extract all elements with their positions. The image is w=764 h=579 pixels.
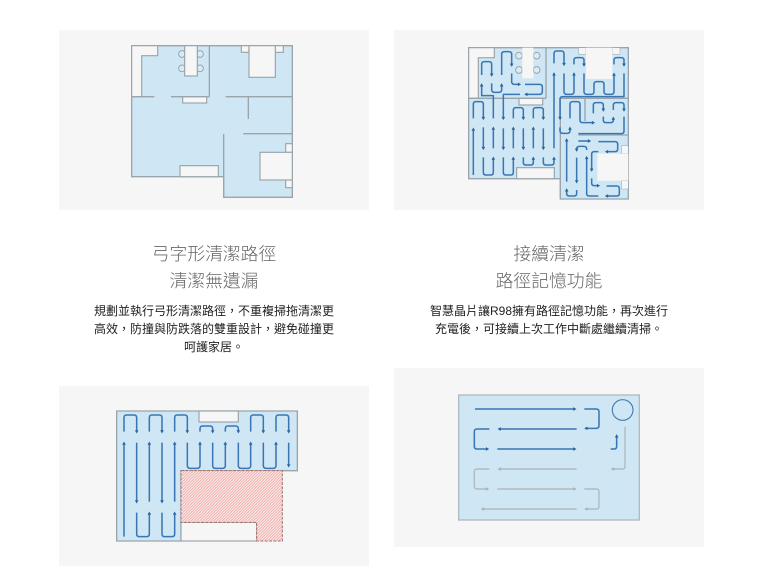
heading: path memory: 路徑記憶功能 (496, 271, 602, 291)
floor plan: room with restricted zone (117, 411, 297, 541)
heading: S-shaped path: 弓字形清潔路徑 (152, 244, 276, 264)
floor plan: rooms (469, 48, 628, 199)
heading: path memory (496, 244, 602, 291)
floor plan: apartment layout (132, 46, 292, 197)
panel: memorised route floor plan (394, 30, 704, 210)
text: S-shaped path description: 呵護家居。 (184, 340, 244, 354)
panel: obstacle avoidance floor plan (59, 386, 369, 566)
text: S-shaped path description: 高效，防撞與防跌落的雙重設計，避免碰撞更 (94, 322, 334, 336)
diagram: room background (459, 395, 639, 520)
text: path memory description (430, 304, 668, 336)
text: S-shaped path description: 規劃並執行弓形清潔路徑，不重複掃拖清潔更 (94, 304, 334, 318)
text: path memory description: 充電後，可接續上次工作中斷處繼續清掃。 (435, 322, 663, 336)
text: S-shaped path description (94, 304, 334, 354)
cleaning route arrows (124, 415, 289, 537)
cleaning route arrows (473, 51, 624, 196)
route already cleaned (474, 400, 633, 449)
route remaining (474, 427, 625, 509)
heading: path memory: 接續清潔 (513, 244, 585, 264)
heading: S-shaped path (152, 244, 276, 291)
panel: empty floor plan (59, 30, 369, 210)
text: path memory description: 智慧晶片讓R98擁有路徑記憶功能，再次進行 (430, 304, 668, 318)
heading: S-shaped path: 清潔無遺漏 (170, 271, 258, 291)
panel: resume cleaning diagram (394, 368, 704, 547)
